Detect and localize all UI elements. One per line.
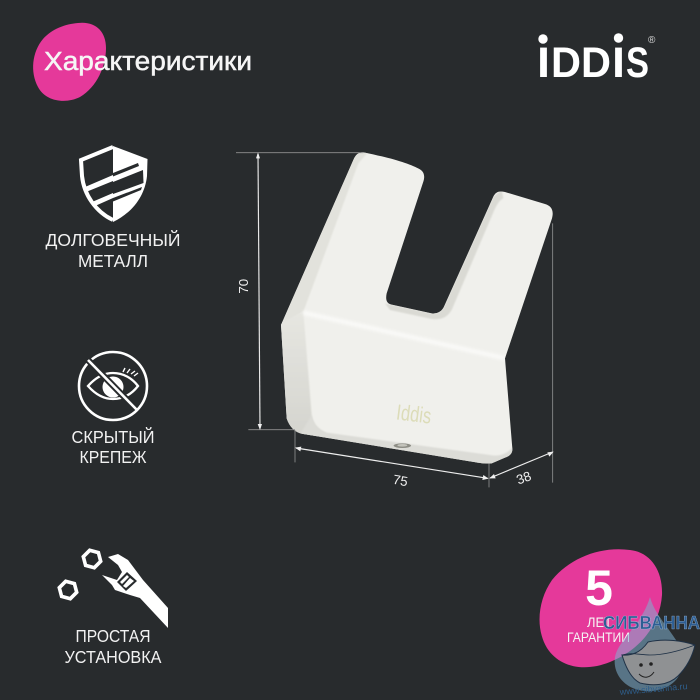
dimension: depth 38	[489, 223, 554, 487]
engraved logo: Iddis	[395, 399, 433, 429]
product drawing: hook with dimensions	[236, 147, 560, 489]
brand logo: iDDiS	[537, 33, 656, 87]
dimension: height 70	[236, 152, 363, 430]
hole	[394, 443, 411, 448]
brand logo: iDDiS: DD	[551, 39, 611, 87]
shaded side lower	[281, 314, 314, 436]
label: КРЕПЕЖ	[80, 447, 146, 467]
header: characteristics	[33, 23, 252, 101]
label: ДОЛГОВЕЧНЫЙ	[46, 229, 180, 250]
label	[64, 626, 162, 667]
feature: easy installation	[59, 550, 168, 667]
feature: hidden fastening	[72, 352, 154, 467]
dimension: height 70: 70	[236, 279, 251, 294]
watermark url: www.sibvanna.ru	[618, 681, 688, 697]
label: ПРОСТАЯ	[76, 626, 150, 646]
shell character	[622, 640, 695, 685]
pink blob	[540, 549, 662, 667]
feature: durable metal	[46, 146, 180, 271]
label	[46, 229, 180, 271]
pink blob behind heading	[33, 23, 106, 101]
drop	[615, 597, 683, 691]
warranty text: ЛЕТ	[587, 615, 612, 630]
dimension: width 75	[295, 430, 489, 489]
number 5: 5	[585, 560, 613, 616]
shaded side upper	[277, 150, 370, 327]
brand logo: iDDiS: I	[537, 39, 550, 87]
warranty text	[567, 615, 630, 645]
brand logo: iDDiS: I	[612, 39, 625, 87]
label: СКРЫТЫЙ	[72, 426, 154, 447]
label	[72, 426, 154, 467]
warranty text: ГАРАНТИИ	[567, 630, 630, 645]
front face crease	[303, 313, 505, 358]
label: УСТАНОВКА	[64, 647, 162, 667]
icon: crossed-out eye	[79, 352, 147, 420]
label: МЕТАЛЛ	[78, 251, 148, 271]
warranty badge	[540, 549, 662, 667]
dimension: width 75: 75	[392, 472, 409, 489]
bottom edge	[301, 420, 512, 464]
heading text: Характеристики	[44, 48, 252, 76]
shaded inner edge	[385, 190, 503, 319]
icon: wrench and nuts	[59, 550, 168, 628]
icon: shield	[81, 146, 148, 222]
dimension: depth 38: 38	[514, 468, 533, 487]
watermark: Sibvanna	[603, 597, 700, 697]
hook body	[277, 147, 560, 470]
brand logo: iDDiS: S	[626, 39, 649, 87]
brand logo: iDDiS: ®	[648, 35, 656, 46]
